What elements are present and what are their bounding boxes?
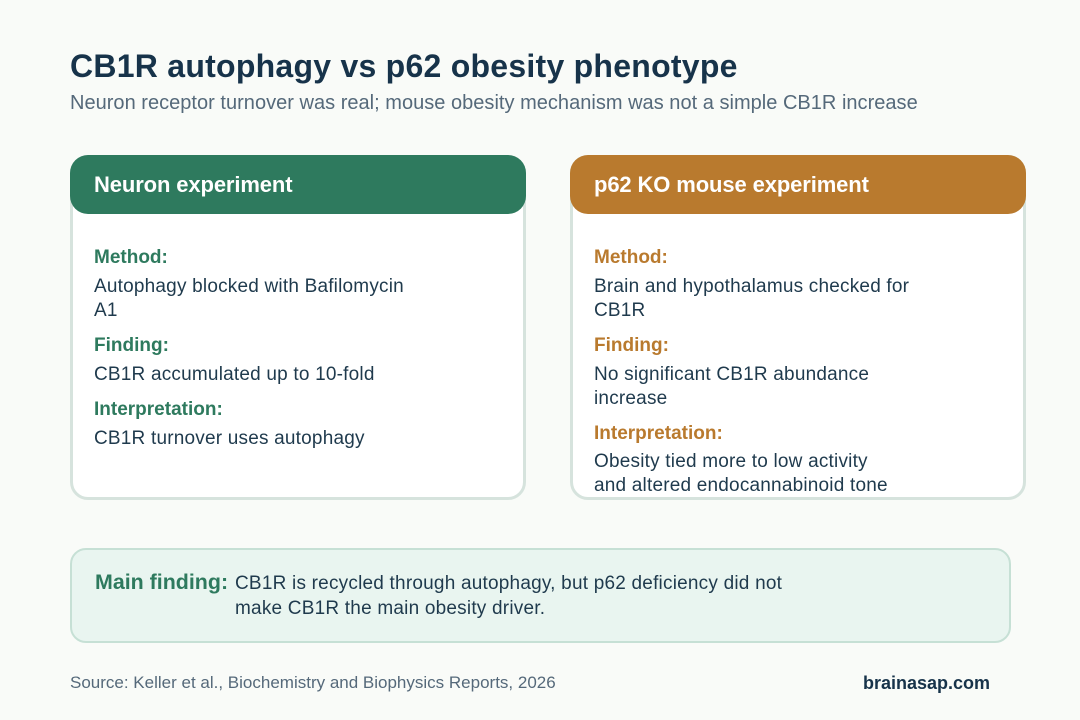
subtitle: Neuron receptor turnover was real; mouse obesity mechanism was not a simple CB1R increase xyxy=(70,92,918,114)
method text xyxy=(594,276,909,321)
interpretation label: Interpretation: xyxy=(594,423,723,444)
panel: p62 KO mouse experiment xyxy=(570,155,1026,500)
method text: Autophagy blocked with Bafilomycin xyxy=(94,276,404,297)
card body xyxy=(570,155,1026,500)
method label: Method: xyxy=(94,247,168,268)
method text: CB1R xyxy=(594,300,645,321)
callout text: CB1R is recycled through autophagy, but p62 deficiency did not xyxy=(235,573,782,594)
finding text xyxy=(594,364,869,409)
card header xyxy=(570,155,1026,214)
card header: Neuron experiment xyxy=(94,172,292,197)
method text: Brain and hypothalamus checked for xyxy=(594,276,909,297)
method text: A1 xyxy=(94,300,118,321)
interpretation text: Obesity tied more to low activity xyxy=(594,451,868,472)
method text xyxy=(94,276,404,321)
callout: main finding xyxy=(70,548,1011,643)
card header xyxy=(70,155,526,214)
interpretation text: CB1R turnover uses autophagy xyxy=(94,428,365,449)
panel: neuron experiment xyxy=(70,155,526,500)
method label: Method: xyxy=(594,247,668,268)
finding text: No significant CB1R abundance xyxy=(594,364,869,385)
card header: p62 KO mouse experiment xyxy=(594,172,869,197)
brand: brainasap.com xyxy=(863,673,990,693)
interpretation label: Interpretation: xyxy=(94,399,223,420)
finding text: CB1R accumulated up to 10-fold xyxy=(94,364,375,385)
finding label: Finding: xyxy=(594,335,669,356)
callout text: make CB1R the main obesity driver. xyxy=(235,598,545,619)
interpretation text xyxy=(594,451,888,496)
callout label: Main finding: xyxy=(95,570,228,594)
source note: Source: Keller et al., Biochemistry and Biophysics Reports, 2026 xyxy=(70,673,556,692)
finding label: Finding: xyxy=(94,335,169,356)
title: CB1R autophagy vs p62 obesity phenotype xyxy=(70,48,738,84)
interpretation text: and altered endocannabinoid tone xyxy=(594,475,888,496)
finding text: increase xyxy=(594,388,667,409)
callout text xyxy=(235,573,782,619)
card body xyxy=(70,155,526,500)
